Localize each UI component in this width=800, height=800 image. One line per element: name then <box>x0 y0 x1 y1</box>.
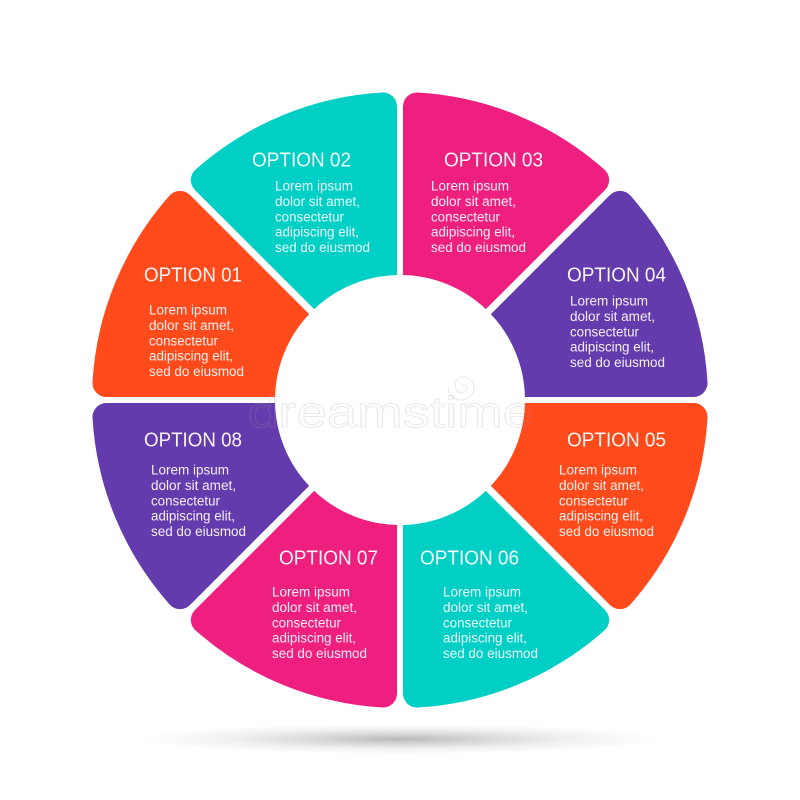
panel: option 07 <box>191 491 397 708</box>
text block: option 01: adipiscing elit, <box>149 349 233 364</box>
text block: option 01: Lorem ipsum <box>149 303 227 318</box>
text block: option 04: Lorem ipsum <box>570 294 648 309</box>
panel: option 02 <box>191 92 397 309</box>
text block: option 08: Lorem ipsum <box>151 463 229 478</box>
ground shadow <box>140 724 660 754</box>
text block: option 03 <box>431 179 526 255</box>
text block: option 08: sed do eiusmod <box>151 524 246 539</box>
panel: option 03 <box>403 92 609 309</box>
text block: option 06 <box>443 585 538 661</box>
text block: option 05: sed do eiusmod <box>559 524 654 539</box>
text block: option 08: consectetur <box>151 493 220 508</box>
text block: option 01: sed do eiusmod <box>149 364 244 379</box>
text block: option 05: consectetur <box>559 493 628 508</box>
text block: option 07 <box>272 585 367 661</box>
text block: option 06: sed do eiusmod <box>443 646 538 661</box>
panel: option 01 <box>92 191 309 397</box>
text block: option 07: consectetur <box>272 615 341 630</box>
text block: option 05: Lorem ipsum <box>559 463 637 478</box>
text block: option 08 <box>151 463 246 539</box>
text block: option 02: dolor sit amet, <box>275 194 360 209</box>
panel: option 05 <box>491 403 708 609</box>
text block: option 03: adipiscing elit, <box>431 225 515 240</box>
segment shape: teal <box>191 92 397 309</box>
text block: option 01 <box>149 303 244 379</box>
text block: option 05 <box>559 463 654 539</box>
watermark spiral icon <box>448 377 474 400</box>
text block: option 03: consectetur <box>431 209 500 224</box>
text block: option 03: dolor sit amet, <box>431 194 516 209</box>
text block: option 01: consectetur <box>149 333 218 348</box>
text block: option 05: adipiscing elit, <box>559 509 643 524</box>
text block: option 03: Lorem ipsum <box>431 179 509 194</box>
heading: option 01: OPTION 01 <box>144 265 242 287</box>
text block: option 02: consectetur <box>275 209 344 224</box>
text block: option 04: adipiscing elit, <box>570 340 654 355</box>
heading: option 02: OPTION 02 <box>252 150 351 172</box>
text block: option 01: dolor sit amet, <box>149 318 234 333</box>
segment shape: orange <box>92 191 309 397</box>
text block: option 05: dolor sit amet, <box>559 478 644 493</box>
text block: option 06: Lorem ipsum <box>443 585 521 600</box>
segment shape: pink <box>403 92 609 309</box>
panel: option 08 <box>92 403 309 609</box>
segment shape: pink <box>191 491 397 708</box>
text block: option 07: sed do eiusmod <box>272 646 367 661</box>
heading: option 07: OPTION 07 <box>279 548 378 570</box>
heading: option 05: OPTION 05 <box>567 430 666 452</box>
text block: option 02: Lorem ipsum <box>275 179 353 194</box>
segment shape: teal <box>403 491 609 708</box>
text block: option 04: dolor sit amet, <box>570 309 655 324</box>
heading: option 08: OPTION 08 <box>144 430 242 452</box>
heading: option 06: OPTION 06 <box>420 548 519 570</box>
text block: option 04: consectetur <box>570 324 639 339</box>
heading: option 03: OPTION 03 <box>444 150 543 172</box>
text block: option 08: dolor sit amet, <box>151 478 236 493</box>
text block: option 03: sed do eiusmod <box>431 240 526 255</box>
watermark <box>248 377 533 437</box>
segment shape: purple <box>92 403 309 609</box>
text block: option 07: adipiscing elit, <box>272 631 356 646</box>
text block: option 04: sed do eiusmod <box>570 355 665 370</box>
heading: option 04: OPTION 04 <box>567 265 666 287</box>
text block: option 06: adipiscing elit, <box>443 631 527 646</box>
text block: option 02: adipiscing elit, <box>275 225 359 240</box>
text block: option 06: dolor sit amet, <box>443 600 528 615</box>
text block: option 06: consectetur <box>443 615 512 630</box>
text block: option 07: dolor sit amet, <box>272 600 357 615</box>
text block: option 02: sed do eiusmod <box>275 240 370 255</box>
text block: option 02 <box>275 179 370 255</box>
watermark wordmark: dreamstime <box>248 388 533 437</box>
segment shape: purple <box>491 191 708 397</box>
text block: option 08: adipiscing elit, <box>151 509 235 524</box>
panel: option 04 <box>491 191 708 397</box>
text block: option 04 <box>570 294 665 370</box>
segment shape: orange <box>491 403 708 609</box>
panel: option 06 <box>403 491 609 708</box>
text block: option 07: Lorem ipsum <box>272 585 350 600</box>
